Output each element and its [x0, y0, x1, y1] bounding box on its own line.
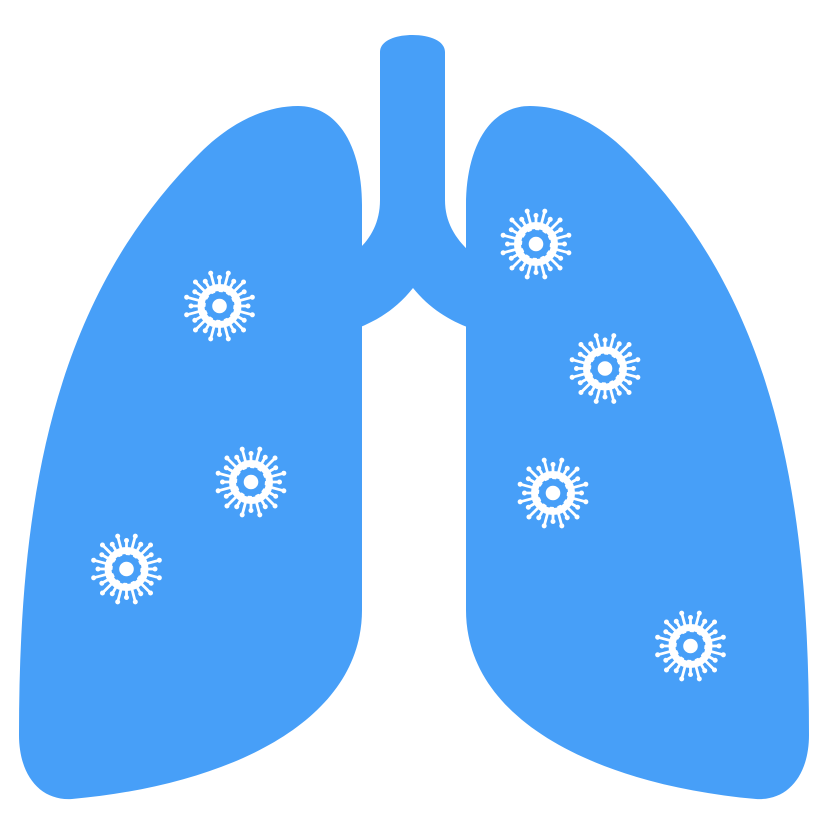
virus 7 — [655, 610, 726, 682]
right lung — [466, 106, 809, 799]
virus 1 — [184, 270, 255, 342]
left lung — [19, 106, 362, 799]
virus 5 — [569, 333, 641, 404]
virus 4 — [500, 208, 572, 280]
trachea and bronchi — [358, 35, 470, 328]
virus 2 — [215, 446, 287, 518]
virus 3 — [91, 533, 162, 605]
virus 6 — [517, 457, 589, 529]
